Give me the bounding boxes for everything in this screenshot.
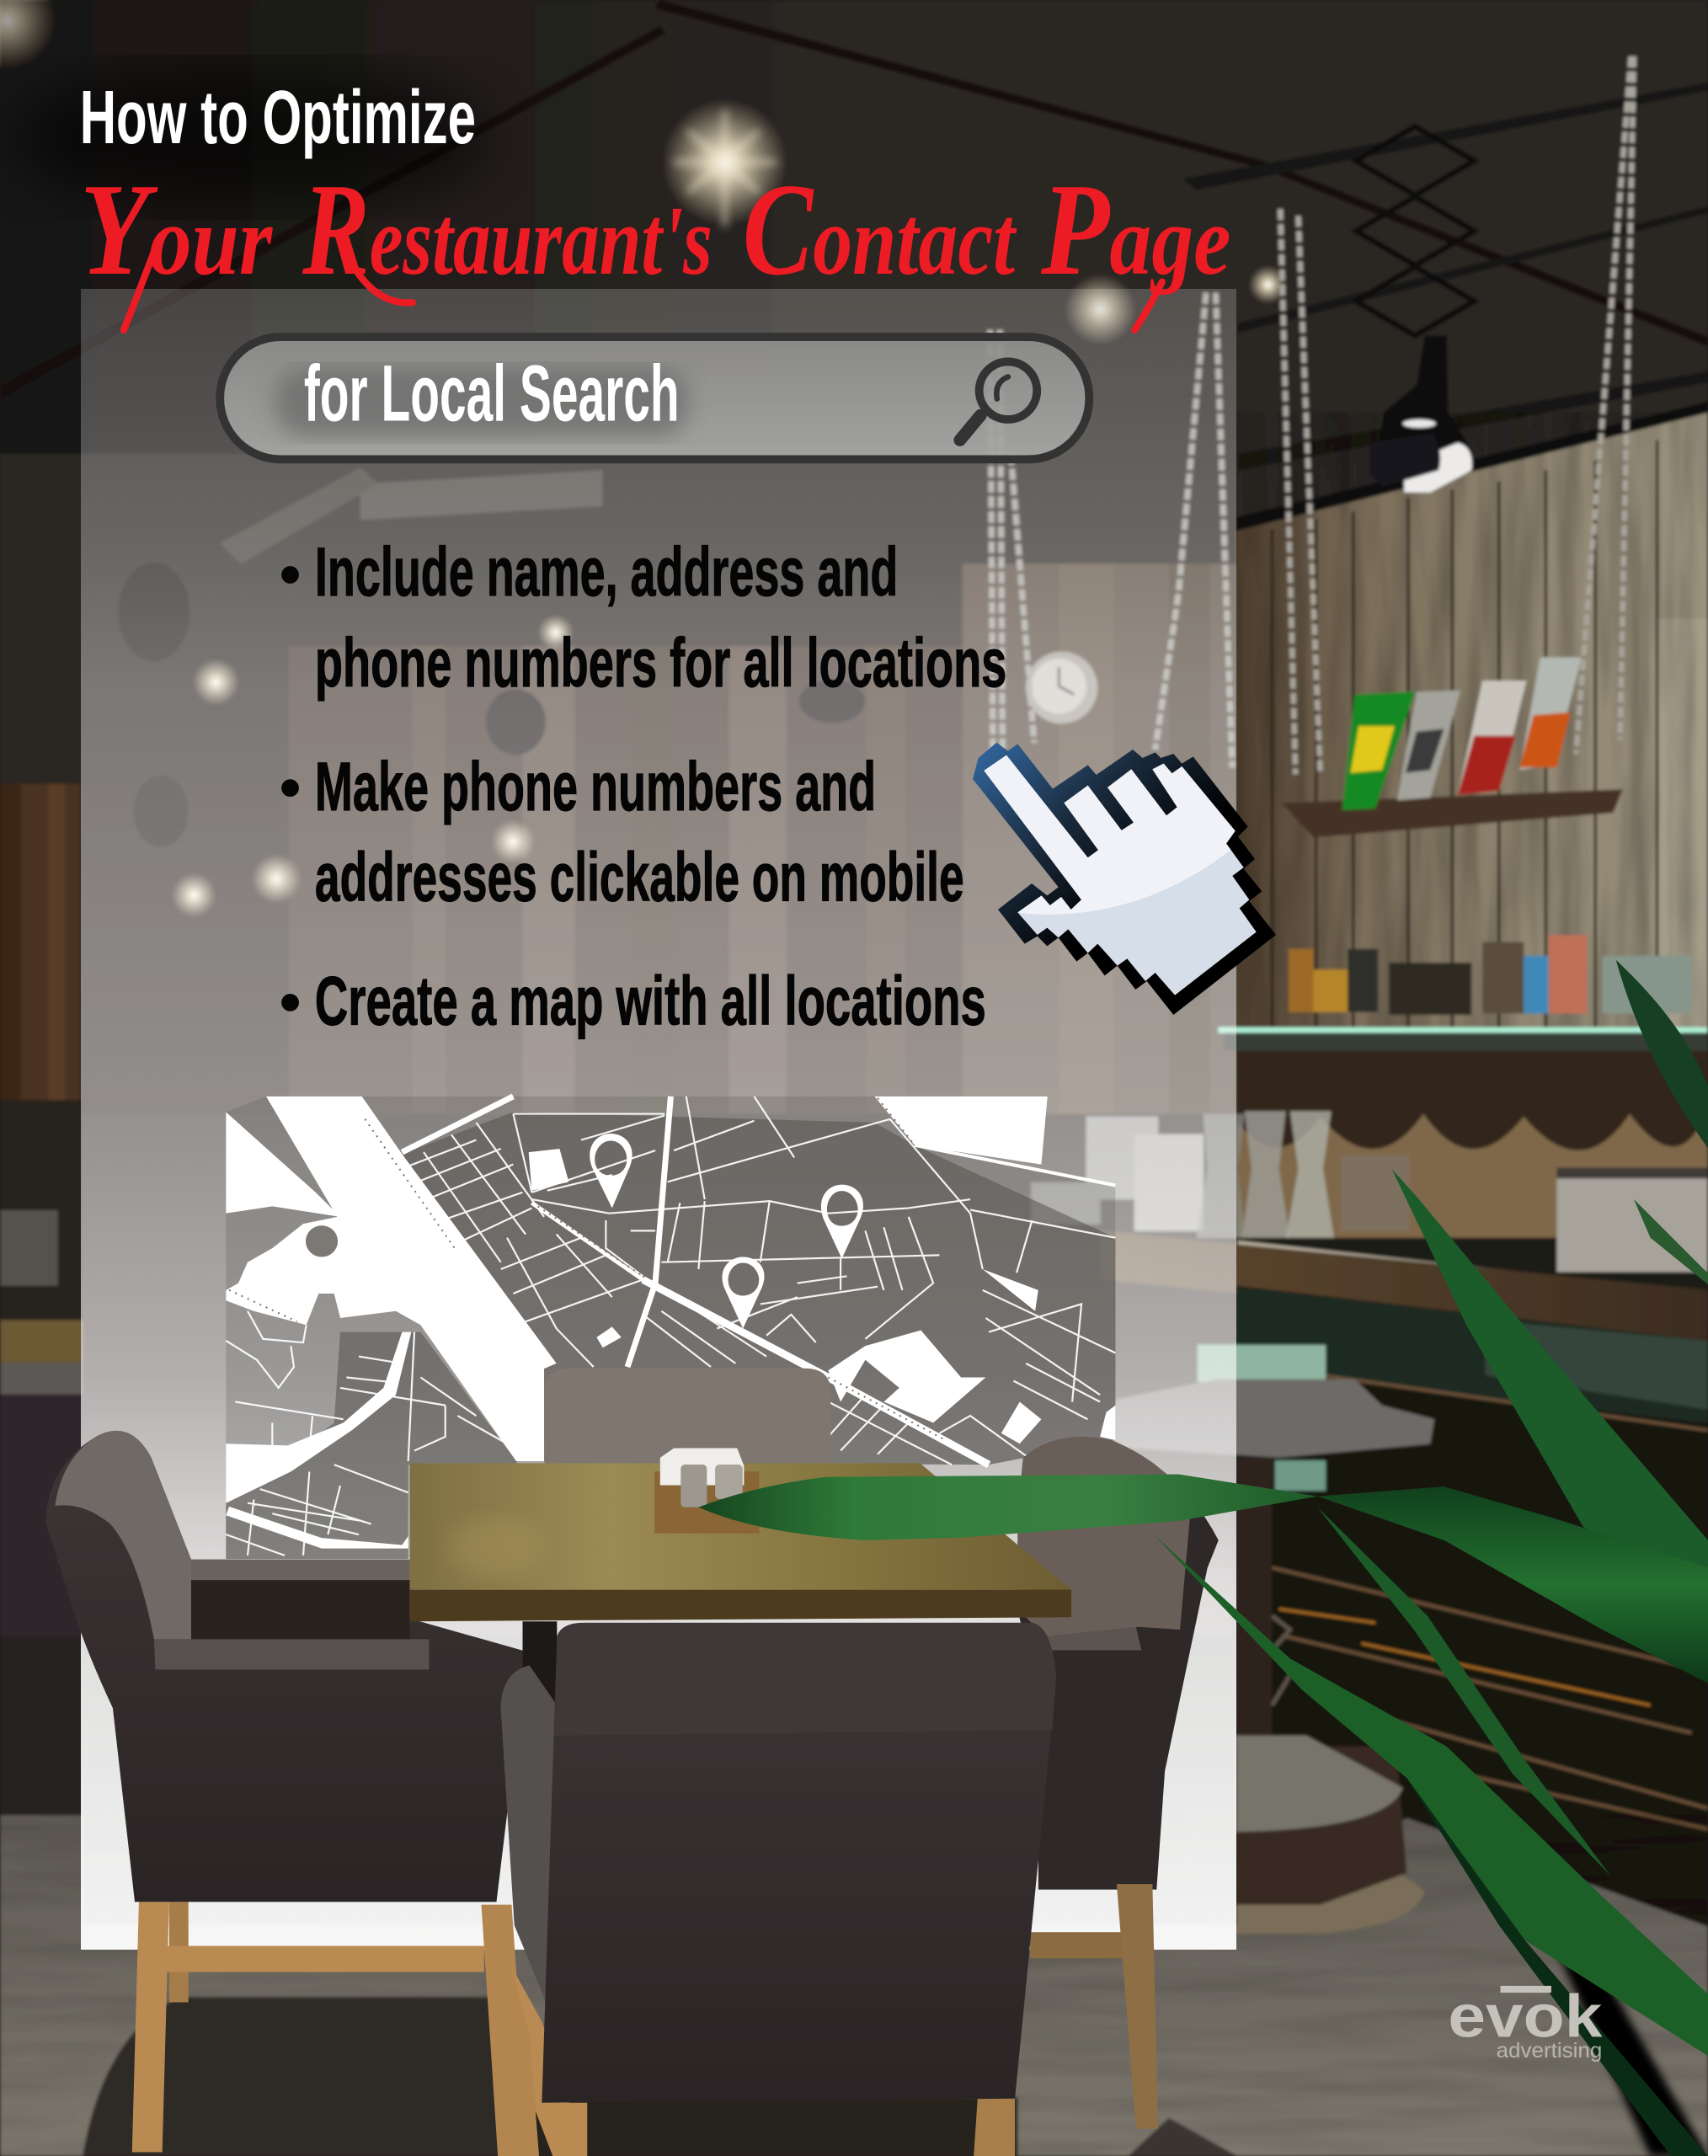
ceiling lights (0, 0, 1287, 917)
shadows under shelf (1236, 1045, 1708, 1238)
leaf: big lower (1154, 1534, 1708, 2056)
bullet 2 (282, 749, 964, 916)
map pin 3 (723, 1257, 765, 1328)
lattice bracket (1356, 126, 1474, 335)
bullet 3 (282, 963, 986, 1040)
script title: Page (1040, 156, 1230, 302)
bullet list (282, 534, 1006, 1040)
bullet 2: Make phone numbers and (315, 749, 876, 825)
plant leaves (699, 960, 1708, 2156)
script title (80, 156, 1230, 330)
plates and carafes (1032, 1111, 1708, 1272)
search bar (220, 337, 1089, 459)
panel: translucent white overlay (81, 289, 1236, 1950)
left chair (45, 1431, 530, 2156)
foreground furniture (45, 960, 1708, 2156)
logo: evok advertising: evok (1448, 1983, 1604, 2050)
right plank wall (1236, 413, 1708, 1059)
table (410, 1463, 1071, 1705)
map roads (226, 1097, 1115, 1556)
bullet 1: Include name, address and (315, 534, 898, 611)
leaf: upper right (1391, 1169, 1708, 1609)
map blocks (226, 1097, 1115, 1559)
hanging chains (990, 56, 1634, 774)
icon: magnifying glass (960, 361, 1037, 440)
front chair (500, 1623, 1056, 2156)
map pin 2 (821, 1185, 863, 1259)
back chair (545, 1369, 830, 1471)
map dense block fill (226, 1112, 1115, 1559)
bullet 1 (282, 534, 1006, 702)
map illustration (226, 1097, 1115, 1559)
script title: Contact (743, 156, 1017, 302)
title block (13, 69, 1230, 330)
bar counter and dark front (963, 1210, 1708, 1321)
right chair (1017, 1437, 1219, 2129)
logo: evok advertising: advertising (1497, 2039, 1602, 2063)
shadow behind search text (275, 369, 687, 437)
floor (0, 1815, 1708, 2156)
map pin 1 (590, 1134, 632, 1208)
map hole (306, 1225, 338, 1257)
script title: Your (80, 156, 273, 302)
leaf: top right (1616, 960, 1708, 1148)
glass shelf with bottles (1219, 935, 1708, 1051)
search text: for Local Search (304, 350, 680, 439)
heading: how to optimize: How to Optimize (80, 76, 476, 160)
bullet 3: Create a map with all locations (315, 963, 986, 1040)
wall behind panel (0, 454, 1238, 784)
hanging spot lamps (118, 563, 865, 847)
stool (1114, 1345, 1434, 1934)
plant shadow (1466, 1799, 1708, 2156)
leaf: long horizontal (1317, 1486, 1708, 1684)
bullet 2: addresses clickable on mobile (315, 840, 964, 916)
leaf: table tip (699, 1474, 1317, 1540)
icon: pixel hand cursor (969, 743, 1278, 1015)
script title: Restaurant's (302, 156, 713, 302)
hanging bottle shelf (1282, 658, 1623, 837)
clock (1026, 652, 1097, 723)
leaf: thin centre (1317, 1508, 1610, 1876)
dark glow behind heading (13, 69, 482, 206)
bullet 1: phone numbers for all locations (315, 625, 1006, 702)
spot lamp (1369, 335, 1474, 493)
napkin holder and shakers (654, 1448, 759, 1534)
map major areas (226, 1097, 1115, 1549)
